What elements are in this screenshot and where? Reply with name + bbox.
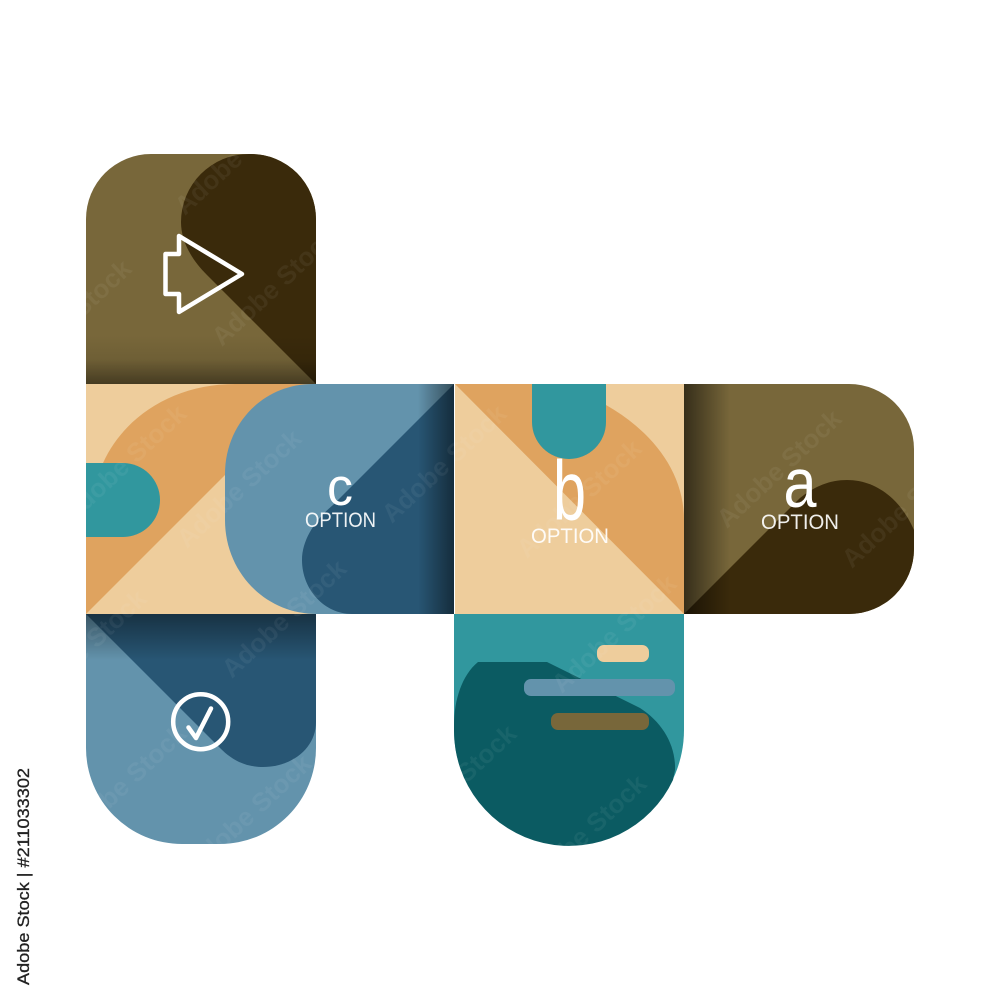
panel: bottom-left blue tab with check xyxy=(86,614,316,844)
text: Adobe Stock xyxy=(1,253,138,384)
text: Adobe Stock xyxy=(56,718,193,849)
text: Adobe Stock xyxy=(546,568,683,699)
label: OPTION: OPTION xyxy=(305,509,376,532)
text: Adobe Stock xyxy=(376,398,513,529)
bar: beige xyxy=(597,645,649,662)
teal tab xyxy=(86,463,160,537)
teal tab xyxy=(532,384,606,459)
text: Adobe Stock xyxy=(216,553,353,684)
panel: option c blue block xyxy=(225,384,454,614)
bar: brown xyxy=(551,713,649,730)
panel: option b beige square xyxy=(455,384,684,614)
bar: blue xyxy=(524,679,675,696)
text: Adobe Stock xyxy=(56,398,193,529)
panel: left beige square with orange arc xyxy=(86,384,316,614)
text: Adobe Stock xyxy=(836,443,973,574)
label: c: c xyxy=(327,458,353,517)
label: OPTION: OPTION xyxy=(531,525,609,548)
panel: option a brown block xyxy=(684,384,914,614)
text: Adobe Stock xyxy=(16,583,153,714)
side credit text: Adobe Stock | #211033302 xyxy=(14,768,33,985)
text: Adobe Stock xyxy=(386,718,523,849)
text: Adobe Stock xyxy=(516,768,653,899)
icon: arrow outline xyxy=(166,236,242,312)
label: a: a xyxy=(784,444,817,522)
text: Adobe Stock xyxy=(511,433,648,564)
text: Adobe Stock xyxy=(36,53,173,184)
label: OPTION: OPTION xyxy=(761,511,839,534)
text: Adobe Stock xyxy=(711,403,848,534)
text: Adobe Stock xyxy=(169,90,306,221)
text: Adobe Stock xyxy=(206,221,343,352)
icon: check in circle xyxy=(173,694,228,749)
text: Adobe Stock xyxy=(181,748,318,879)
text: Adobe Stock xyxy=(171,423,308,554)
panel: bottom teal tab with bars xyxy=(454,614,684,846)
label: b: b xyxy=(553,444,586,538)
panel: top brown tab with arrow xyxy=(86,154,316,384)
